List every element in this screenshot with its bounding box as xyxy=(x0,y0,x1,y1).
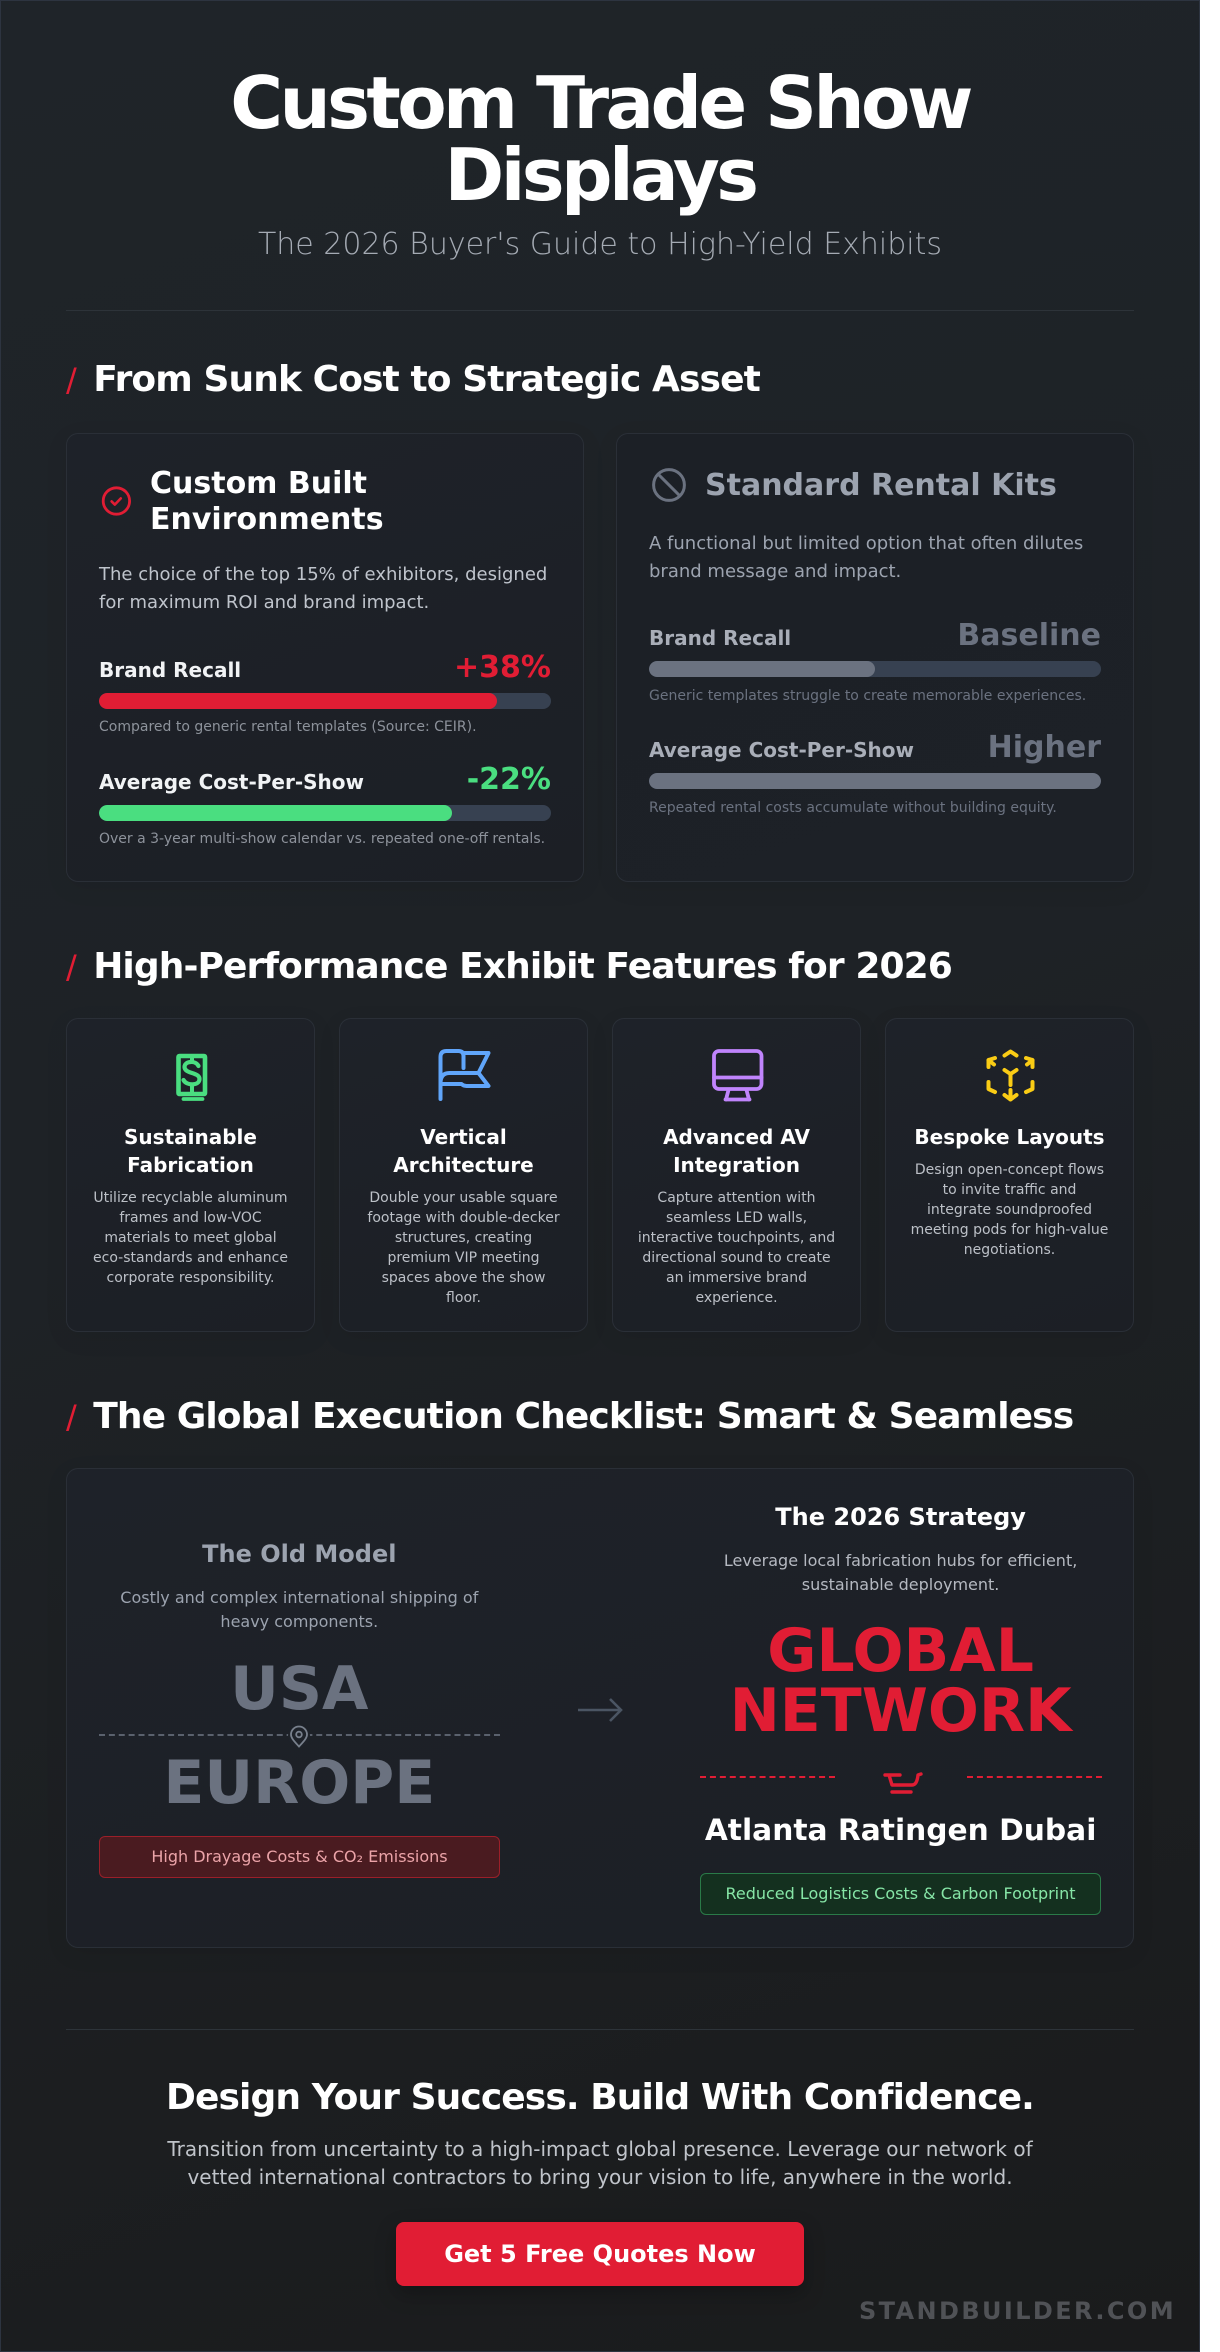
feature text xyxy=(93,1190,288,1286)
icon: purple monitor xyxy=(712,1049,764,1102)
card description xyxy=(98,564,547,613)
icon: check circle xyxy=(102,486,131,516)
feature text: structures, creating xyxy=(395,1230,532,1246)
feature text: Utilize recyclable aluminum xyxy=(93,1190,288,1206)
metric label: brand recall: Brand Recall xyxy=(99,658,241,682)
panel: standard rental kits xyxy=(616,433,1134,882)
icon: yellow cube arrows xyxy=(986,1050,1035,1102)
callout: high drayage costs: High Drayage Costs & CO₂ Emissions xyxy=(151,1847,448,1866)
cta text: vetted international contractors to bring your vision to life, anywhere in the world. xyxy=(187,2164,1013,2188)
feature title: Architecture xyxy=(393,1153,534,1177)
bar: cost per show xyxy=(99,805,551,821)
old model text: heavy components. xyxy=(220,1612,378,1630)
bar: brand recall xyxy=(99,693,551,709)
feature title: Integration xyxy=(673,1153,800,1177)
panel: sustainable fabrication xyxy=(66,1018,315,1332)
feature text xyxy=(911,1162,1108,1258)
feature text: negotiations. xyxy=(964,1242,1055,1258)
metric label: brand recall: Brand Recall xyxy=(649,626,791,650)
bar: cost per show xyxy=(649,773,1101,789)
cta text: Transition from uncertainty to a high-impact global presence. Leverage our network of xyxy=(167,2136,1033,2160)
card description xyxy=(649,533,1083,582)
feature title xyxy=(663,1125,810,1177)
callout: reduced costs: Reduced Logistics Costs & Carbon Footprint xyxy=(725,1884,1076,1903)
feature text: materials to meet global xyxy=(104,1230,277,1246)
note: cost per show: Repeated rental costs accumulate without building equity. xyxy=(649,800,1057,816)
strategy text xyxy=(724,1550,1077,1594)
feature title xyxy=(124,1125,257,1177)
feature text: eco-standards and enhance xyxy=(93,1250,288,1266)
feature text: integrate soundproofed xyxy=(927,1202,1092,1218)
feature title: Vertical xyxy=(420,1125,507,1149)
callout: high drayage costs xyxy=(99,1836,500,1878)
feature text: meeting pods for high-value xyxy=(911,1222,1108,1238)
title: Custom Trade Show xyxy=(230,61,970,145)
metric label: cost per show: Average Cost-Per-Show xyxy=(99,770,364,794)
note: cost per show: Over a 3-year multi-show calendar vs. repeated one-off rentals. xyxy=(99,831,545,847)
feature text: directional sound to create xyxy=(642,1250,831,1266)
feature text: footage with double-decker xyxy=(367,1210,560,1226)
card description: The choice of the top 15% of exhibitors, designed xyxy=(99,564,547,585)
card heading xyxy=(150,466,384,537)
feature title: Bespoke Layouts xyxy=(914,1125,1105,1149)
feature text xyxy=(367,1190,560,1306)
old model text xyxy=(120,1588,479,1630)
icon: blue flag xyxy=(438,1049,491,1101)
old model title: The Old Model xyxy=(202,1540,396,1568)
metric value: +38%: +38% xyxy=(454,650,551,685)
big label: global network: NETWORK xyxy=(730,1676,1072,1746)
metric label: cost per show: Average Cost-Per-Show xyxy=(649,738,914,762)
big label: EUROPE: EUROPE xyxy=(163,1748,435,1818)
panel: vertical architecture xyxy=(339,1018,588,1332)
heading: features: / High-Performance Exhibit Features for 2026 xyxy=(66,946,952,986)
strategy text: sustainable deployment. xyxy=(802,1574,999,1594)
feature title xyxy=(393,1125,534,1177)
icon: prohibited xyxy=(652,468,686,502)
feature text: Capture attention with xyxy=(657,1190,816,1206)
heading: strategic asset: / From Sunk Cost to Strategic Asset xyxy=(66,359,760,400)
strategy title: The 2026 Strategy xyxy=(775,1503,1026,1531)
big label: USA: USA xyxy=(230,1654,368,1724)
watermark: STANDBUILDER.COM xyxy=(859,2297,1176,2325)
feature text: premium VIP meeting xyxy=(387,1250,540,1266)
cta text xyxy=(167,2136,1034,2188)
subtitle: The 2026 Buyer's Guide to High-Yield Exhibits xyxy=(258,227,942,262)
card description: for maximum ROI and brand impact. xyxy=(99,592,429,613)
cta heading: Design Your Success. Build With Confidence. xyxy=(166,2077,1034,2118)
feature text: Design open-concept flows xyxy=(915,1162,1104,1178)
note: brand recall: Generic templates struggle to create memorable experiences. xyxy=(649,688,1086,704)
panel: global execution xyxy=(66,1468,1134,1948)
feature title: Fabrication xyxy=(127,1153,254,1177)
feature text xyxy=(638,1190,835,1306)
feature text: seamless LED walls, xyxy=(666,1210,807,1226)
card heading: Standard Rental Kits xyxy=(705,468,1057,503)
feature text: to invite traffic and xyxy=(943,1182,1076,1198)
note: brand recall: Compared to generic rental templates (Source: CEIR). xyxy=(99,719,477,735)
title xyxy=(230,61,971,217)
feature text: corporate responsibility. xyxy=(106,1270,275,1286)
panel: bespoke layouts xyxy=(885,1018,1134,1332)
old model text: Costly and complex international shipping of xyxy=(120,1588,478,1606)
card description: A functional but limited option that often dilutes xyxy=(649,533,1083,554)
big label: global network xyxy=(730,1616,1074,1746)
strategy text: Leverage local fabrication hubs for efficient, xyxy=(724,1550,1077,1570)
callout: reduced costs xyxy=(700,1873,1101,1915)
cities list: Atlanta Ratingen Dubai xyxy=(705,1813,1096,1848)
cta button: Get 5 Free Quotes Now xyxy=(444,2240,756,2268)
feature text: floor. xyxy=(446,1290,481,1306)
card heading: Custom Built xyxy=(150,466,367,501)
icon: map pin xyxy=(288,1726,310,1748)
panel: advanced av integration xyxy=(612,1018,861,1332)
arrow xyxy=(578,1698,623,1722)
bar: brand recall xyxy=(649,661,1101,677)
feature text: Double your usable square xyxy=(369,1190,558,1206)
cta button xyxy=(396,2222,804,2286)
metric value: -22%: -22% xyxy=(467,762,551,797)
feature text: experience. xyxy=(695,1290,778,1306)
feature title: Advanced AV xyxy=(663,1125,810,1149)
card description: brand message and impact. xyxy=(649,561,901,582)
feature text: spaces above the show xyxy=(382,1270,545,1286)
feature title: Sustainable xyxy=(124,1125,257,1149)
feature text: interactive touchpoints, and xyxy=(638,1230,835,1246)
metric value: baseline: Baseline xyxy=(957,618,1101,653)
icon: green banknote xyxy=(176,1054,208,1101)
big label: global network: GLOBAL xyxy=(767,1616,1034,1686)
heading: global checklist: / The Global Execution Checklist: Smart & Seamless xyxy=(66,1396,1073,1437)
feature text: frames and low-VOC xyxy=(119,1210,262,1226)
icon: network hub xyxy=(883,1772,923,1794)
feature text: an immersive brand xyxy=(666,1270,807,1286)
title: Displays xyxy=(445,133,755,217)
card heading: Environments xyxy=(150,502,384,537)
panel: custom built environments xyxy=(66,433,584,882)
metric value: higher: Higher xyxy=(988,730,1101,765)
